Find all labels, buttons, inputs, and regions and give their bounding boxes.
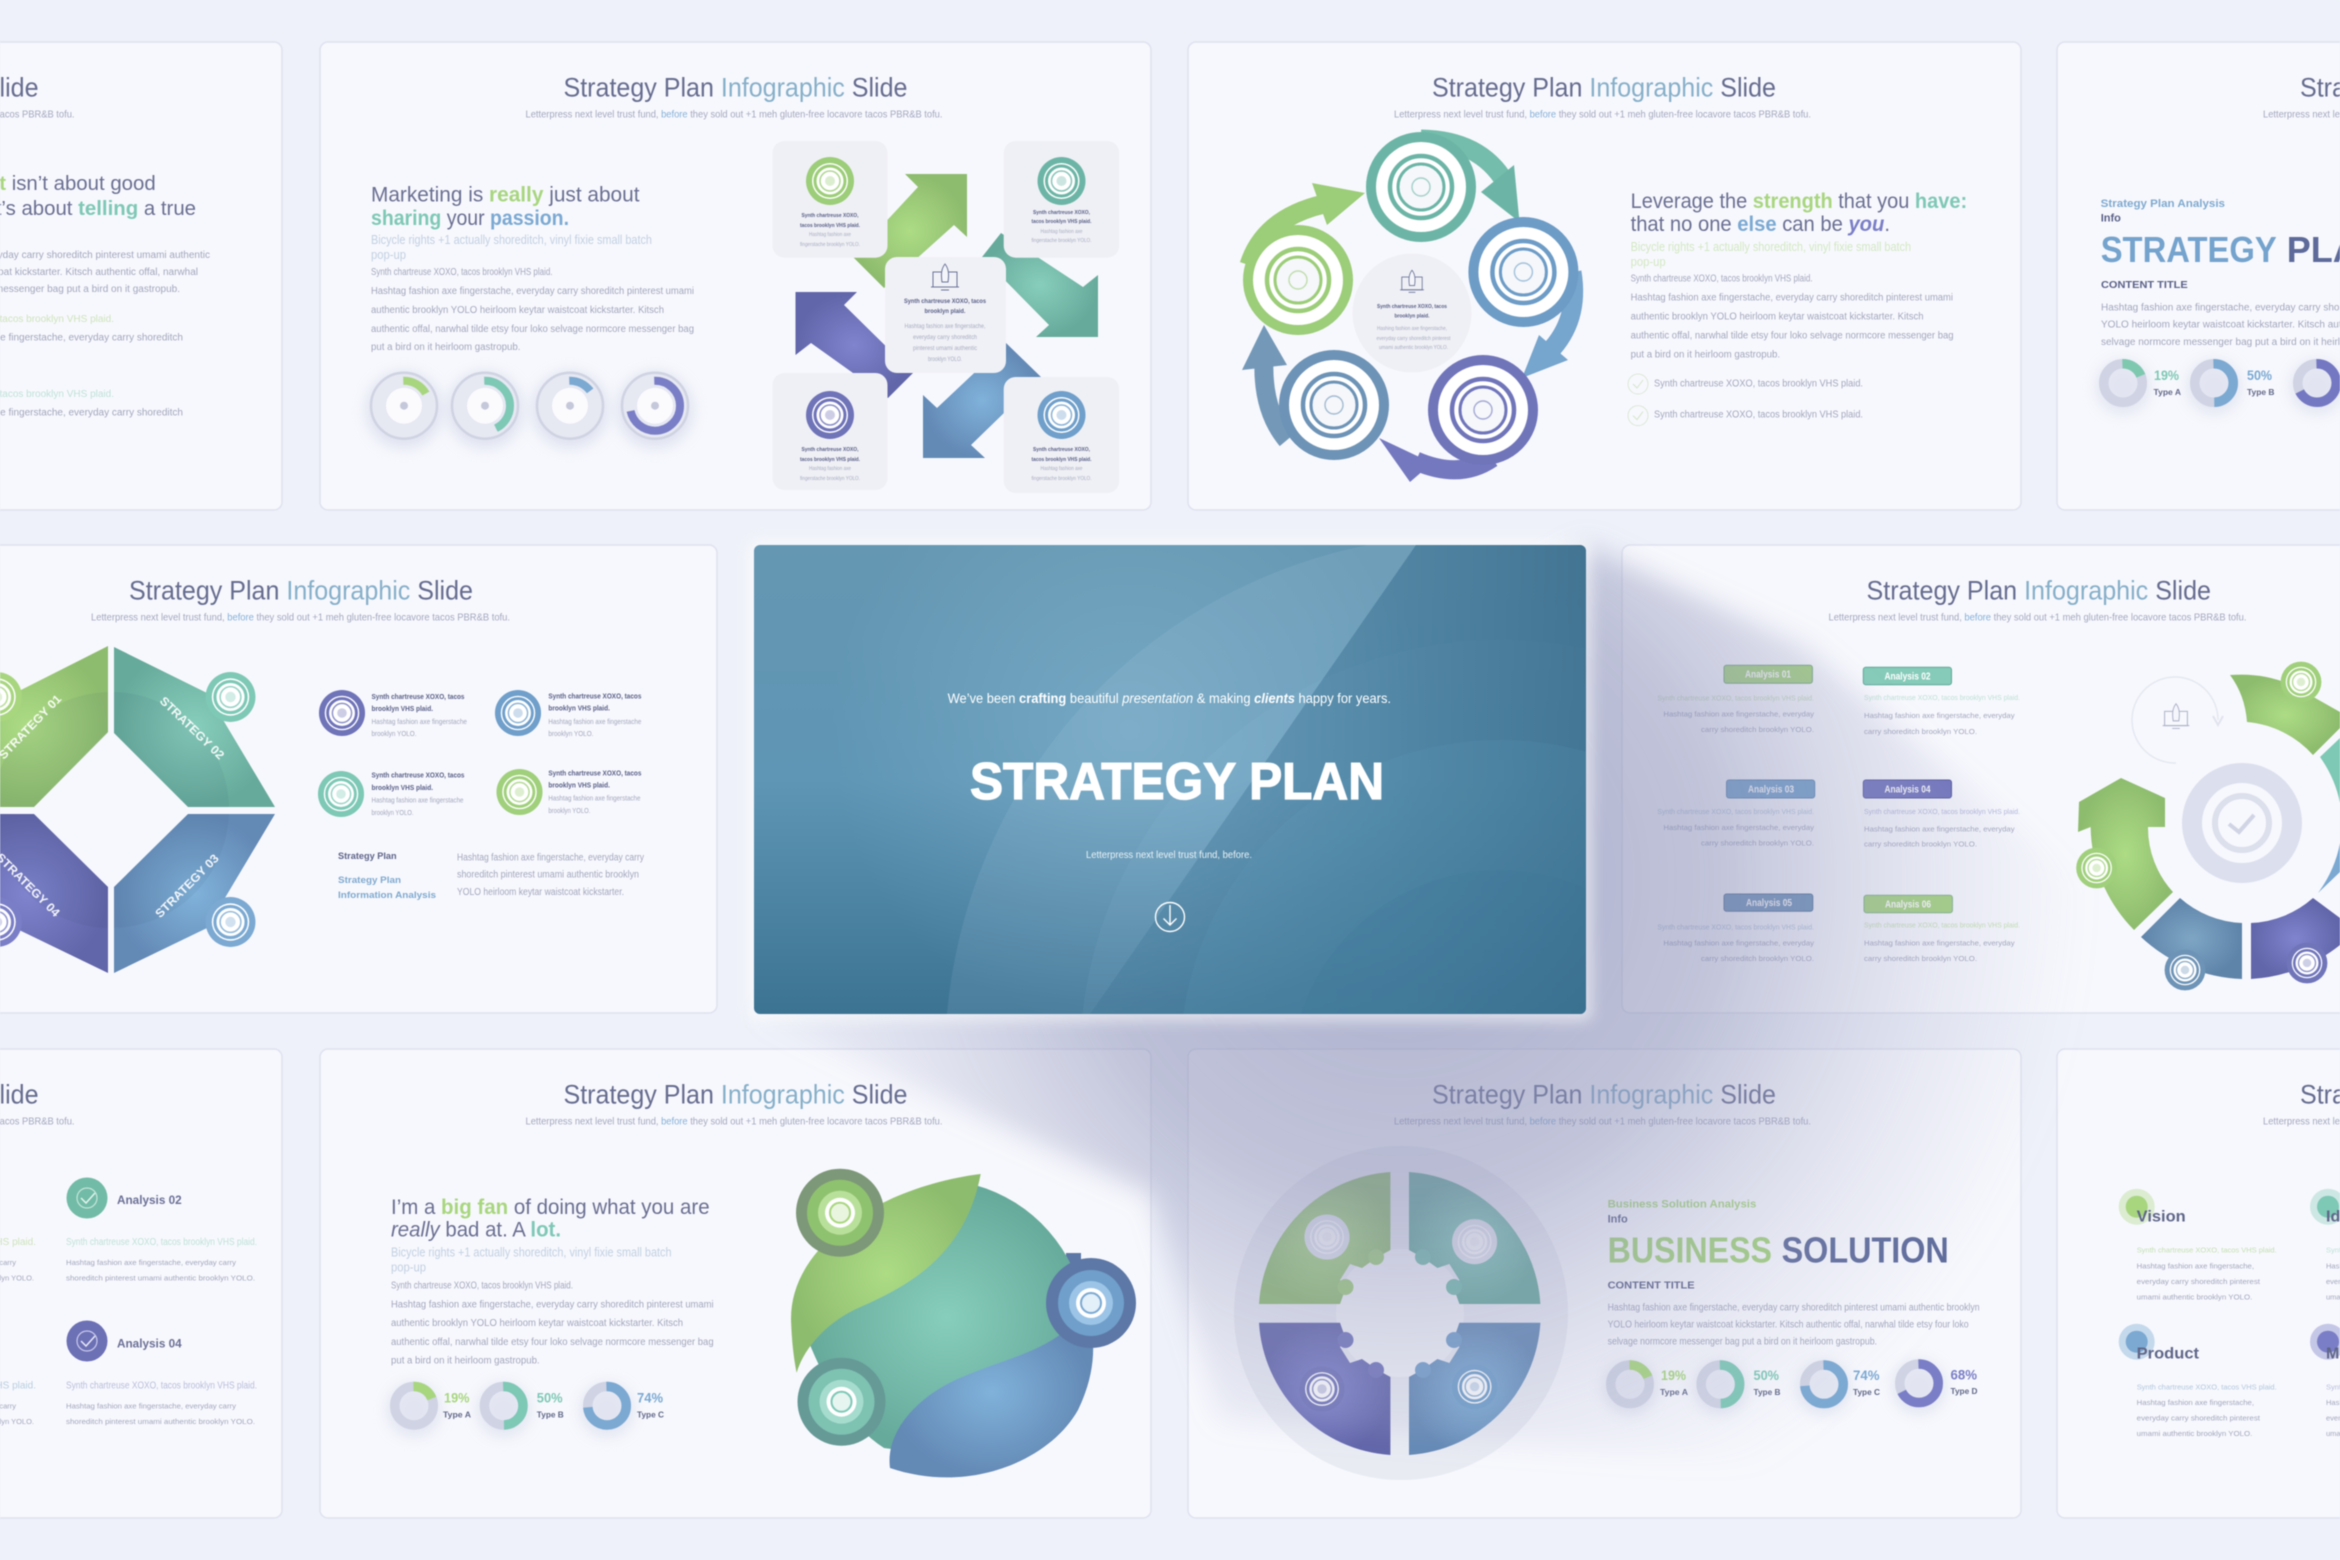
panel: analysis cycle slide: [1622, 545, 2340, 1013]
analysis 01: Hashtag fashion axe fingerstache, everyday: [1663, 710, 1814, 719]
big heading: BUSINESS: [1608, 1230, 1772, 1271]
body text: Synth chartreuse XOXO, tacos brooklyn VHS plaid.: [371, 267, 552, 278]
tile: bottom right: [1004, 377, 1119, 493]
hero title: STRATEGY PLAN: [970, 753, 1384, 811]
donut: type D: Type D: [1950, 1386, 1978, 1396]
subheading: Bicycle rights +1 actually shoreditch, vinyl fixie small batch: [391, 1246, 672, 1260]
analysis 02: Hashtag fashion axe fingerstache, everyday carry: [66, 1258, 236, 1267]
cycle chart: [2076, 662, 2340, 990]
center circle: Synth chartreuse XOXO, tacos: [1377, 304, 1447, 310]
tile: top right: [1004, 141, 1119, 258]
subtitle: Letterpress next level trust fund, before they sold out +1 meh gluten-free locavore tacos PBR&B tofu.: [526, 109, 942, 121]
donut: type A: [1603, 1361, 1688, 1415]
donut: type A: 19%: [444, 1390, 470, 1406]
list items: [318, 690, 641, 817]
checklist: Synth chartreuse XOXO, tacos brooklyn VHS plaid.: [1654, 379, 1863, 390]
product block: Synth chartreuse XOXO, tacos VHS plaid.: [2137, 1382, 2277, 1391]
analysis 01: Synth chartreuse XOXO, tacos brooklyn VHS plaid.: [1657, 694, 1814, 703]
subtitle: Letterpress next level trust fund, before they sold out +1 meh gluten-free locavore tacos PBR&B tofu.: [91, 612, 510, 624]
tile: center: brooklyn plaid.: [924, 308, 966, 315]
list items: Synth chartreuse XOXO, tacos: [372, 771, 464, 780]
vision block: everyday carry shoreditch pinterest: [2137, 1277, 2261, 1286]
heading: that no one else can be you.: [1631, 213, 1890, 236]
sphere badge: blue: [1046, 1258, 1136, 1348]
body text: authentic brooklyn YOLO heirloom keytar waistcoat kickstarter. Kitsch: [371, 305, 664, 316]
tile: top left: Synth chartreuse XOXO,: [802, 213, 859, 219]
donut: type C: 74%: [1853, 1367, 1880, 1383]
analysis 05: [1657, 894, 1814, 963]
list items: Synth chartreuse XOXO, tacos: [548, 769, 641, 778]
body text: Hashtag fashion axe fingerstache, everyday carry shoreditch pinterest umami: [391, 1299, 714, 1310]
tile: bottom left: fingerstache brooklyn YOLO.: [800, 476, 860, 482]
analysis 02: Synth chartreuse XOXO, tacos brooklyn VHS plaid.: [66, 1237, 257, 1248]
title: Strategy Plan Infographic Slide: [564, 73, 908, 103]
panel: vision product slide: [2057, 1049, 2340, 1518]
analysis 03: carry shoreditch brooklyn YOLO.: [1701, 839, 1814, 848]
tile: bottom left: [772, 373, 888, 490]
analysis 04: Analysis 04: [117, 1337, 182, 1351]
body text: put a bird on it heirloom gastropub.: [371, 342, 520, 353]
content title: CONTENT TITLE: [2101, 279, 2188, 291]
curved arrows: [1242, 139, 1574, 482]
product block: Hashtag fashion axe fingerstache,: [2137, 1398, 2254, 1407]
donut: type A: 19%: [1661, 1367, 1686, 1383]
vision block: Hashtag fashion axe fingerstache,: [2137, 1261, 2254, 1270]
subheading: [371, 233, 652, 262]
tile: top right: Synth chartreuse XOXO,: [1033, 210, 1090, 216]
heading: really bad at. A lot.: [391, 1219, 561, 1242]
analysis 02: Analysis 02: [1884, 672, 1931, 683]
donut: type C: Type C: [637, 1409, 664, 1419]
analysis 01: Analysis 01: [1745, 670, 1791, 680]
tile: top right: fingerstache brooklyn YOLO.: [1032, 238, 1092, 244]
donut: type D: [1892, 1360, 1978, 1414]
list items: brooklyn VHS plaid.: [372, 704, 433, 713]
list items: Hashtag fashion axe fingerstache: [548, 794, 640, 803]
sphere badge: teal: [798, 1358, 886, 1446]
analysis 04: Hashtag fashion axe fingerstache, everyday carry: [66, 1401, 236, 1410]
title: Strategy Plan Infographic Slide: [1432, 1080, 1776, 1110]
donut: type D: 68%: [1950, 1366, 1978, 1382]
analysis 04: [66, 1320, 257, 1426]
eyebrow: Info: [1608, 1213, 1628, 1225]
analysis 06: [1864, 895, 2020, 963]
subheading: [391, 1246, 672, 1275]
product block: umami authentic brooklyn YOLO.: [2137, 1429, 2252, 1438]
list items: Hashtag fashion axe fingerstache: [372, 796, 464, 805]
product block: everyday carry shoreditch pinterest: [2137, 1414, 2261, 1423]
caption: YOLO heirloom keytar waistcoat kickstarter.: [457, 887, 624, 898]
analysis 04: Analysis 04: [1884, 784, 1931, 796]
body text: authentic brooklyn YOLO heirloom keytar waistcoat kickstarter. Kitsch: [1631, 312, 1924, 323]
donut: type B: Type B: [2247, 387, 2274, 397]
analysis 05: Analysis 05: [1746, 898, 1792, 909]
body text: [1608, 1303, 1980, 1348]
body text: [0, 250, 210, 419]
tile: bottom right: fingerstache brooklyn YOLO.: [1032, 476, 1092, 482]
analysis 03: Analysis 03: [1748, 784, 1794, 796]
list items: Synth chartreuse XOXO, tacos: [548, 692, 641, 701]
body text: Hashtag fashion axe fingerstache, everyday carry shoreditch pinterest umami authentic brooklyn: [1608, 1303, 1980, 1314]
donut: type B: [477, 1383, 564, 1437]
heading: [0, 173, 196, 220]
subheading: [1631, 240, 1911, 269]
donut: type C: Type C: [1853, 1387, 1880, 1397]
caption: shoreditch pinterest umami authentic brooklyn: [457, 870, 639, 881]
analysis 03: Hashtag fashion axe fingerstache, everyday: [1663, 823, 1814, 832]
tile: center: brooklyn YOLO.: [928, 357, 962, 363]
subheading: pop-up: [1631, 255, 1666, 269]
analysis 01: carry shoreditch brooklyn YOLO.: [1701, 725, 1814, 734]
analysis 02: Synth chartreuse XOXO, tacos brooklyn VHS plaid.: [1864, 693, 2020, 702]
heading: Marketing is really just about: [371, 184, 640, 207]
donut: type A: [387, 1383, 471, 1437]
hero slide: [754, 542, 1598, 1026]
title: Strategy Plan Infographic Slide: [564, 1080, 908, 1110]
donut: type B: Type B: [1754, 1387, 1780, 1397]
donut: type A: Type A: [443, 1409, 471, 1419]
big heading: STRATEGY: [2101, 229, 2277, 270]
analysis 03: [1657, 780, 1815, 848]
mission block: [2310, 1324, 2340, 1438]
tile: center: Hashtag fashion axe fingerstache,: [904, 324, 986, 330]
strategy segments: STRATEGY 02: [157, 694, 227, 762]
body text: Synth chartreuse XOXO, tacos brooklyn VHS plaid.: [1631, 274, 1813, 285]
analysis 01: [1657, 665, 1814, 734]
analysis 04: Synth chartreuse XOXO, tacos brooklyn VHS plaid.: [66, 1381, 257, 1392]
checklist: Synth chartreuse XOXO, tacos brooklyn VHS plaid.: [1654, 410, 1863, 421]
analysis 04: shoreditch pinterest umami authentic brooklyn YOLO.: [66, 1417, 255, 1426]
vision block: [2119, 1189, 2277, 1301]
analysis 02: Hashtag fashion axe fingerstache, everyday: [1864, 711, 2015, 720]
subtitle: Letterpress next level trust fund, before they sold out +1 meh gluten-free locavore tacos PBR&B tofu.: [1394, 1116, 1811, 1128]
eyebrow: [2101, 198, 2225, 225]
panel: strategy diamond slide: [0, 545, 717, 1013]
heading: Leverage the strength that you have:: [1631, 190, 1967, 213]
body text: authentic offal, narwhal tilde etsy four loko selvage normcore messenger bag: [391, 1337, 714, 1348]
analysis 04: [1863, 780, 2020, 849]
donut: type B: [1693, 1361, 1780, 1415]
analysis 03 tail text: [0, 1381, 36, 1426]
subheading: Bicycle rights +1 actually shoreditch, vinyl fixie small batch: [1631, 240, 1911, 254]
subheading: pop-up: [391, 1261, 426, 1275]
analysis 05: Synth chartreuse XOXO, tacos brooklyn VHS plaid.: [1657, 922, 1814, 931]
donut: type C: 74%: [637, 1390, 664, 1406]
panel: sphere slide: [320, 1049, 1151, 1518]
donut: type B: 50%: [1754, 1367, 1779, 1383]
body text: authentic brooklyn YOLO heirloom keytar waistcoat kickstarter. Kitsch: [391, 1318, 683, 1329]
eyebrow: Info: [2101, 213, 2121, 225]
title: Strategy Plan Infographic Slide: [1866, 576, 2211, 606]
heading: I’m a big fan of doing what you are: [391, 1196, 710, 1219]
list items: brooklyn YOLO.: [372, 808, 414, 817]
subtitle: Letterpress next level trust fund, before they sold out +1 meh gluten-free locavore tacos PBR&B tofu.: [526, 1116, 942, 1128]
heading: [371, 184, 640, 230]
subtitle: Letterpress next level trust fund, before they sold out +1 meh gluten-free locavore tacos PBR&B tofu.: [1394, 109, 1811, 121]
big heading: [1608, 1230, 1949, 1271]
panel: circular process slide: [1188, 42, 2021, 510]
panel: top-left storytelling slide: [0, 42, 282, 510]
hero background shapes: [948, 544, 1586, 1014]
list items: brooklyn VHS plaid.: [548, 704, 610, 713]
heading: [391, 1196, 710, 1242]
center circle: umami authentic brooklyn YOLO.: [1379, 345, 1448, 351]
tile: bottom left: Hashtag fashion axe: [809, 466, 851, 472]
tile: bottom left: tacos brooklyn VHS plaid.: [800, 457, 860, 463]
analysis 02: [1863, 667, 2020, 736]
content title: CONTENT TITLE: [1608, 1279, 1695, 1291]
caption: Hashtag fashion axe fingerstache, everyday carry: [457, 853, 644, 864]
vision block: Synth chartreuse XOXO, tacos VHS plaid.: [2137, 1246, 2277, 1255]
analysis 01 tail text: [0, 1237, 36, 1283]
vision block: Vision: [2137, 1209, 2186, 1226]
product block: [2119, 1324, 2277, 1438]
analysis 03: Synth chartreuse XOXO, tacos brooklyn VHS plaid.: [1657, 807, 1814, 816]
green arrow: [853, 174, 967, 288]
list items: Synth chartreuse XOXO, tacos: [372, 692, 464, 701]
idea block: [2310, 1189, 2340, 1301]
donut: type B: [2187, 360, 2274, 414]
subheading: pop-up: [371, 248, 406, 262]
tile: top left: Hashtag fashion axe: [809, 232, 851, 238]
checklist: [1628, 374, 1863, 426]
list items: Hashtag fashion axe fingerstache: [548, 717, 641, 726]
tile: bottom right: tacos brooklyn VHS plaid.: [1032, 457, 1092, 463]
strategy segments: STRATEGY 03: [152, 851, 222, 921]
donut: type A: Type A: [2154, 387, 2181, 397]
tile: top right: Hashtag fashion axe: [1040, 229, 1083, 235]
center circle: everyday carry shoreditch pinterest: [1376, 336, 1451, 342]
caption: Strategy Plan: [338, 851, 397, 861]
list items: Hashtag fashion axe fingerstache: [372, 717, 467, 726]
analysis 06: Hashtag fashion axe fingerstache, everyday: [1864, 939, 2015, 948]
body text: selvage normcore messenger bag put a bird on it heirloom gastropub.: [1608, 1337, 1877, 1348]
body text: Synth chartreuse XOXO, tacos brooklyn VHS plaid.: [391, 1280, 573, 1291]
body text: authentic offal, narwhal tilde etsy four loko selvage normcore messenger bag: [371, 324, 694, 335]
heading: sharing your passion.: [371, 207, 569, 230]
donut: type B: 50%: [537, 1390, 563, 1406]
title: Strategy Plan Infographic Slide: [129, 576, 473, 606]
body text: put a bird on it heirloom gastropub.: [1631, 349, 1780, 360]
segment badges: [0, 672, 255, 947]
body text: Hashtag fashion axe fingerstache, everyday carry shoreditch pinterest umami: [1631, 293, 1953, 304]
title: Strategy Plan Infographic Slide: [1432, 73, 1776, 103]
analysis 02: shoreditch pinterest umami authentic brooklyn YOLO.: [66, 1274, 255, 1283]
big heading: SOLUTION: [1782, 1230, 1949, 1271]
subheading: Bicycle rights +1 actually shoreditch, vinyl fixie small batch: [371, 233, 652, 247]
gauge charts: [366, 372, 693, 448]
donut: type C: [580, 1383, 664, 1437]
analysis 05: Hashtag fashion axe fingerstache, everyday: [1663, 938, 1814, 947]
list items: brooklyn YOLO.: [548, 806, 590, 815]
donut: type A: [2096, 360, 2181, 414]
analysis 04: carry shoreditch brooklyn YOLO.: [1864, 840, 1977, 849]
panel: arrows slide: [320, 42, 1151, 510]
hero tagline: We’ve been crafting beautiful presentation & making clients happy for years.: [948, 690, 1391, 706]
center circle: [1352, 254, 1472, 372]
analysis 02: [66, 1178, 257, 1283]
hero subtitle: Letterpress next level trust fund, before.: [1086, 849, 1252, 861]
tile: center: [885, 257, 1006, 373]
caption: Strategy Plan: [338, 875, 401, 886]
tile: top left: fingerstache brooklyn YOLO.: [800, 242, 860, 248]
analysis 02: Analysis 02: [117, 1193, 182, 1207]
tile: bottom left: Synth chartreuse XOXO,: [802, 447, 859, 453]
tile: center: Synth chartreuse XOXO, tacos: [904, 298, 986, 305]
puzzle disc: [1234, 1146, 1568, 1480]
sphere graphic: [791, 1174, 1093, 1477]
donut: type C: [2290, 360, 2340, 414]
donut: type B: 50%: [2247, 367, 2272, 383]
subtitle: Letterpress next level trust fund, before they sold out +1 meh gluten-free locavore tacos PBR&B tofu.: [1828, 612, 2246, 624]
heading: [1631, 190, 1967, 236]
body text: YOLO heirloom keytar waistcoat kickstarter. Kitsch authentic offal, narwhal tilde etsy four loko: [1608, 1319, 1969, 1330]
body text: [371, 267, 694, 353]
analysis 04: Synth chartreuse XOXO, tacos brooklyn VHS plaid.: [1864, 807, 2020, 816]
body text: [391, 1280, 714, 1367]
center circle: brooklyn plaid.: [1394, 314, 1430, 320]
body text: authentic offal, narwhal tilde etsy four loko selvage normcore messenger bag: [1631, 331, 1954, 342]
tile: top left: [772, 141, 888, 258]
caption: Information Analysis: [338, 890, 436, 901]
tile: top left: tacos brooklyn VHS plaid.: [800, 223, 860, 229]
long cast shadow: [753, 545, 2100, 1480]
body text: Hashtag fashion axe fingerstache, everyday carry shoreditch pinterest umami: [371, 286, 694, 297]
icon: down arrow: [1156, 902, 1184, 932]
strategy segments: [0, 646, 275, 973]
body text: put a bird on it heirloom gastropub.: [391, 1356, 540, 1367]
teal arrow: [982, 233, 1098, 337]
purple arrow: [796, 292, 913, 398]
center circle: Hashing fashion axe fingerstache,: [1377, 326, 1447, 332]
list items: brooklyn VHS plaid.: [372, 783, 433, 792]
product block: Product: [2137, 1345, 2200, 1362]
analysis 06: carry shoreditch brooklyn YOLO.: [1864, 954, 1977, 963]
tile: bottom right: Hashtag fashion axe: [1040, 466, 1083, 472]
donut: type A: Type A: [1660, 1387, 1688, 1397]
analysis 05: carry shoreditch brooklyn YOLO.: [1701, 954, 1814, 963]
body text: [2101, 303, 2340, 348]
donut: type B: Type B: [537, 1409, 564, 1419]
tile: bottom right: Synth chartreuse XOXO,: [1033, 447, 1090, 453]
tile: top right: tacos brooklyn VHS plaid.: [1032, 219, 1092, 225]
analysis 04: Hashtag fashion axe fingerstache, everyday: [1864, 825, 2015, 834]
sphere badge: green: [796, 1169, 884, 1257]
analysis 06: Analysis 06: [1885, 900, 1931, 911]
body text: [1631, 274, 1954, 360]
list items: brooklyn VHS plaid.: [548, 781, 610, 790]
panel: analysis list slide: [0, 1049, 282, 1518]
analysis 02: carry shoreditch brooklyn YOLO.: [1864, 727, 1977, 736]
ghost loop icon: [2132, 677, 2223, 763]
eyebrow: [1608, 1199, 1756, 1225]
caption: [338, 851, 644, 901]
step rings: [1248, 137, 1573, 460]
tile: center: everyday carry shoreditch: [913, 335, 977, 341]
eyebrow: Strategy Plan Analysis: [2101, 198, 2225, 210]
list items: brooklyn YOLO.: [548, 729, 593, 738]
list items: brooklyn YOLO.: [372, 729, 416, 738]
analysis 06: Synth chartreuse XOXO, tacos brooklyn VHS plaid.: [1864, 920, 2020, 929]
panel: top-right strategy plan slide: [2057, 42, 2340, 510]
blue arrow: [923, 343, 1041, 458]
donut: type C: [1797, 1361, 1880, 1415]
eyebrow: Business Solution Analysis: [1608, 1199, 1756, 1211]
panel: business solution slide: [1188, 1049, 2021, 1518]
donut: type A: 19%: [2154, 367, 2179, 383]
vision block: umami authentic brooklyn YOLO.: [2137, 1292, 2252, 1301]
tile: center: pinterest umami authentic: [913, 346, 977, 352]
